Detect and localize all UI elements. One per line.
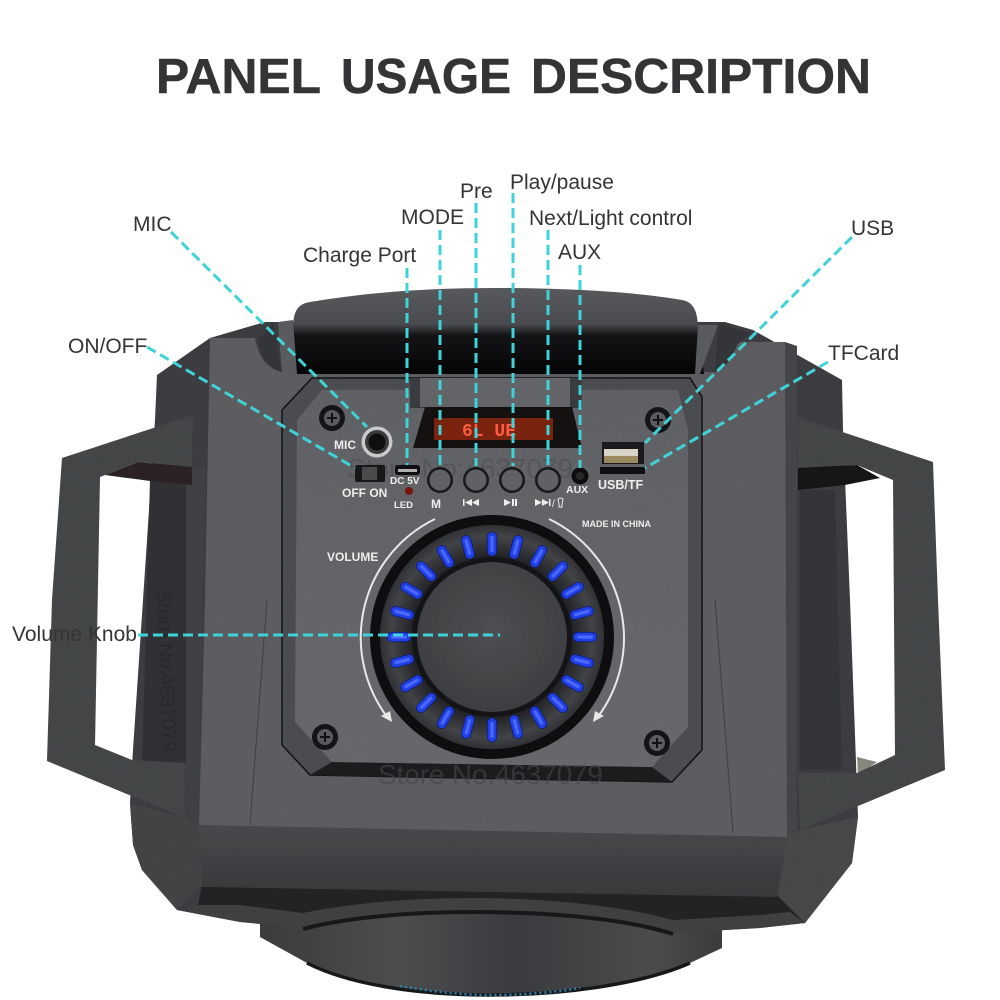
- title word: DESCRIPTION: DESCRIPTION: [531, 50, 871, 104]
- top strip left: [278, 320, 297, 374]
- USB port: [602, 442, 644, 464]
- ON/OFF line: [147, 347, 355, 468]
- left column watermark: Store No.4637079: [152, 589, 180, 752]
- next and light icon: /: [552, 499, 555, 510]
- display reading: 6L UE: [462, 422, 516, 442]
- display recess: [410, 378, 582, 408]
- Charge Port label: Charge Port: [303, 244, 416, 267]
- speaker: [47, 288, 945, 995]
- top handle: [285, 288, 704, 374]
- MIC label: MIC: [334, 438, 356, 452]
- Next/Light control line: [546, 230, 550, 466]
- base dark edge: [307, 963, 690, 995]
- M label: M: [431, 497, 441, 511]
- left face strip: [186, 467, 206, 825]
- left recess notch: [258, 322, 282, 372]
- left lower corner: [130, 803, 202, 910]
- knob gap: [412, 557, 572, 717]
- Pre line: [474, 203, 478, 466]
- lower dark shadow band: [197, 885, 805, 930]
- title word: PANEL: PANEL: [156, 50, 321, 104]
- front panel bottom bevel: [310, 762, 672, 782]
- small rear piece behind right handle: [857, 757, 877, 775]
- left column recess: [142, 480, 186, 763]
- Volume Knob line: [138, 634, 500, 636]
- Play/pause label: Play/pause: [510, 171, 614, 194]
- title: [156, 50, 871, 104]
- front panel: [295, 390, 688, 767]
- MIC label: MIC: [133, 213, 172, 236]
- USB/TF label: USB/TF: [598, 478, 644, 492]
- LED ring: [380, 525, 604, 749]
- right handle inner shadow: [798, 465, 880, 490]
- previous icon: [463, 499, 479, 506]
- play pause icon: [504, 499, 517, 506]
- volume direction arcs: [361, 519, 624, 722]
- front face: [199, 338, 787, 837]
- MODE line: [438, 230, 442, 466]
- speaker base: [260, 905, 722, 995]
- USB label: USB: [851, 217, 894, 240]
- MODE label: MODE: [401, 206, 464, 229]
- knob cap: [417, 562, 567, 712]
- MADE IN CHINA label: MADE IN CHINA: [582, 519, 651, 529]
- right side handle: [797, 417, 945, 830]
- top strip right: [695, 325, 718, 374]
- volume knob: [370, 515, 614, 759]
- left side handle: [47, 415, 193, 818]
- MIC line: [171, 232, 367, 427]
- display glow: [434, 418, 553, 440]
- callout lines: [138, 193, 852, 635]
- TF slot: [600, 467, 645, 474]
- AUX label: AUX: [566, 484, 588, 496]
- USB line: [645, 237, 852, 443]
- knob recess: [370, 515, 614, 759]
- Volume Knob label: Volume Knob: [12, 623, 137, 646]
- lip shadow line: [303, 912, 673, 934]
- next and light icon: [535, 498, 563, 510]
- charge port: [395, 465, 420, 475]
- display window: [413, 407, 582, 448]
- display cover: [420, 378, 570, 407]
- AUX line: [578, 265, 582, 468]
- control buttons: [427, 467, 561, 493]
- panel watermark: Store No:4637079: [347, 453, 573, 484]
- Play/pause line: [512, 193, 514, 466]
- screws: [312, 405, 671, 756]
- front panel rim: [282, 378, 702, 782]
- base LED edge: [400, 986, 580, 995]
- callout labels: [12, 171, 899, 646]
- OFF ON label: OFF ON: [342, 486, 387, 500]
- VOLUME label: VOLUME: [327, 550, 378, 564]
- lower lip: [177, 898, 805, 933]
- TFCard label: TFCard: [828, 342, 899, 365]
- cabinet silhouette: [130, 322, 858, 933]
- AUX jack: [572, 468, 588, 484]
- Pre label: Pre: [460, 180, 493, 203]
- lower band: [199, 825, 787, 897]
- store watermark: Store No.4637079: [378, 759, 603, 790]
- LED indicator: [405, 487, 413, 495]
- LED label: LED: [394, 500, 413, 511]
- right recess notch: [715, 323, 750, 372]
- LED bars: [387, 532, 597, 742]
- title word: USAGE: USAGE: [341, 50, 511, 104]
- right column recess: [800, 490, 842, 770]
- face seams: [250, 600, 733, 832]
- left handle inner shadow: [105, 462, 192, 485]
- right face strip: [785, 342, 797, 837]
- right lower corner: [777, 817, 858, 923]
- Charge Port line: [406, 268, 408, 465]
- TFCard line: [645, 362, 828, 468]
- MIC jack: [362, 426, 392, 458]
- ON/OFF label: ON/OFF: [68, 335, 147, 358]
- DC 5V label: DC 5V: [390, 476, 420, 487]
- power switch: [355, 465, 385, 482]
- Next/Light control label: Next/Light control: [529, 207, 692, 230]
- AUX label: AUX: [558, 241, 601, 264]
